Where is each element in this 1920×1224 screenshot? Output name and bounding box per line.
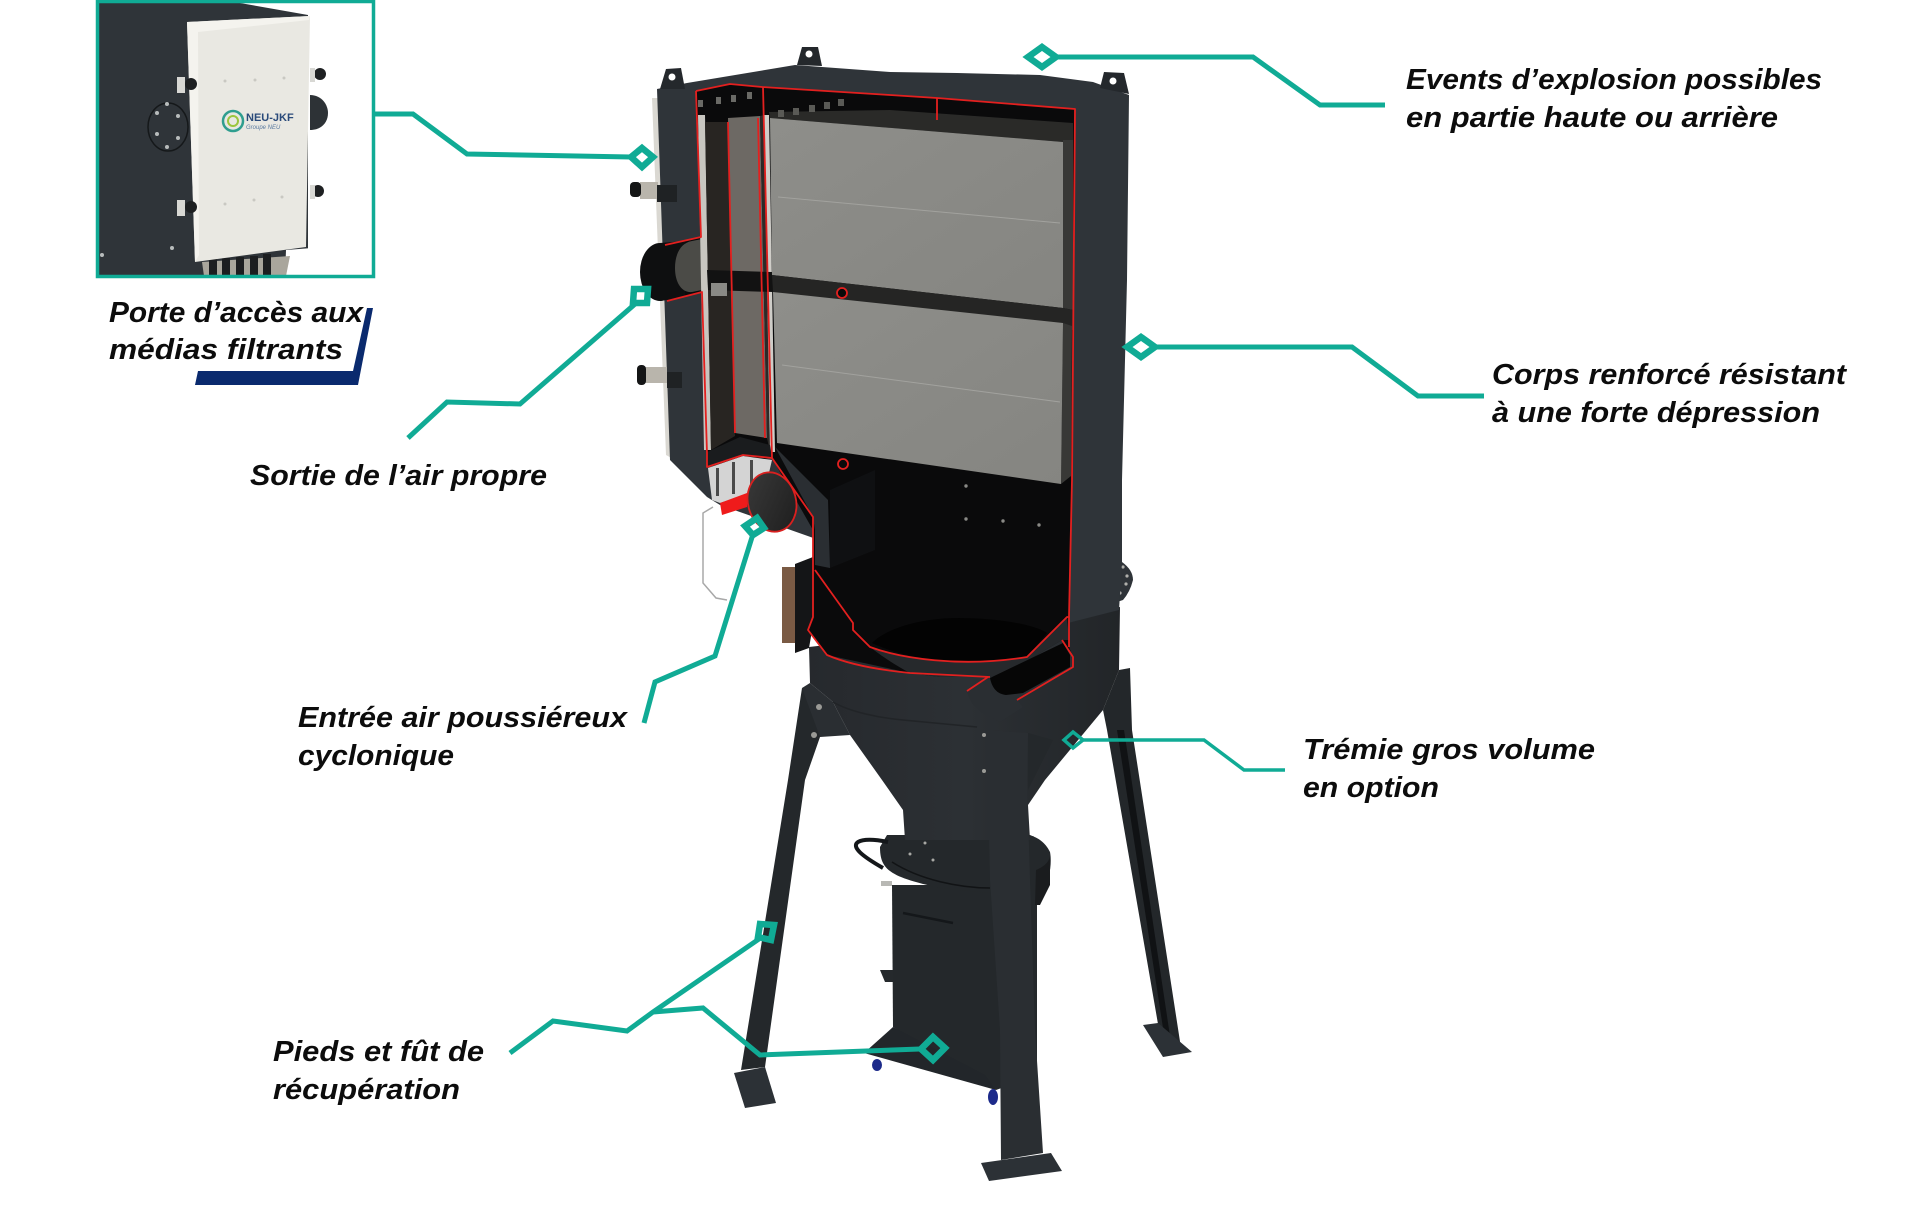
label: explosion vents: Events d’explosion possibles	[1406, 64, 1822, 96]
label: legs and drum: récupération	[273, 1074, 460, 1106]
inset logo: NEU-JKF	[246, 112, 294, 124]
callout: hopper	[1064, 732, 1285, 770]
duct outlet	[640, 239, 702, 301]
callout: legs and drum	[510, 924, 945, 1060]
callout: cyclonic inlet	[644, 518, 764, 723]
label: clean air outlet: Sortie de l’air propre	[250, 460, 547, 492]
body shell	[657, 65, 1129, 625]
label: hopper: en option	[1303, 772, 1439, 804]
upper strip above filters	[769, 110, 1073, 142]
side box with terminals	[782, 557, 813, 653]
left leg	[734, 683, 850, 1108]
inset logo: Groupe NEU	[246, 125, 281, 131]
lifting ears	[660, 47, 1129, 94]
label: explosion vents: en partie haute ou arrière	[1406, 102, 1778, 134]
inset logo	[223, 111, 294, 131]
front leg	[981, 730, 1062, 1181]
cut outlines	[665, 84, 1075, 677]
lower bowl	[870, 617, 1069, 677]
pulse valves	[703, 456, 772, 600]
filter rail	[772, 275, 1073, 330]
machine: dust collector	[630, 47, 1192, 1181]
label: cyclonic inlet: cyclonique	[298, 740, 454, 772]
door edge	[652, 98, 675, 460]
label: access door: Porte d’accès aux	[109, 297, 365, 329]
open interior	[665, 84, 1075, 700]
label: legs and drum: Pieds et fût de	[273, 1036, 484, 1068]
callout: explosion vents	[1028, 47, 1385, 105]
door clamps	[630, 182, 682, 388]
label: reinforced body: à une forte dépression	[1492, 397, 1820, 429]
hopper cone	[809, 607, 1120, 840]
inset: access door photo	[97, 2, 374, 277]
callout: reinforced body	[1127, 337, 1484, 396]
inset frame	[98, 2, 374, 276]
drum and trolley	[856, 835, 1051, 1105]
navy corner accent	[195, 308, 373, 385]
lower filter	[773, 292, 1072, 484]
callout: clean air outlet	[408, 289, 648, 438]
label: access door: médias filtrants	[109, 334, 343, 366]
cyclone inlet	[741, 467, 803, 537]
upper filter	[770, 118, 1073, 310]
tangential inlet	[967, 640, 1073, 722]
hopper band seam	[833, 702, 977, 727]
inner rear plate	[830, 470, 875, 568]
inclined duct plate	[775, 447, 830, 568]
flange	[1071, 560, 1133, 617]
label: reinforced body: Corps renforcé résistant	[1492, 359, 1847, 391]
label: cyclonic inlet: Entrée air poussiéreux	[298, 702, 629, 734]
filter column	[698, 92, 775, 467]
label: hopper: Trémie gros volume	[1303, 734, 1595, 766]
callout: inset connector	[375, 114, 653, 167]
right leg and foot	[1103, 668, 1192, 1057]
